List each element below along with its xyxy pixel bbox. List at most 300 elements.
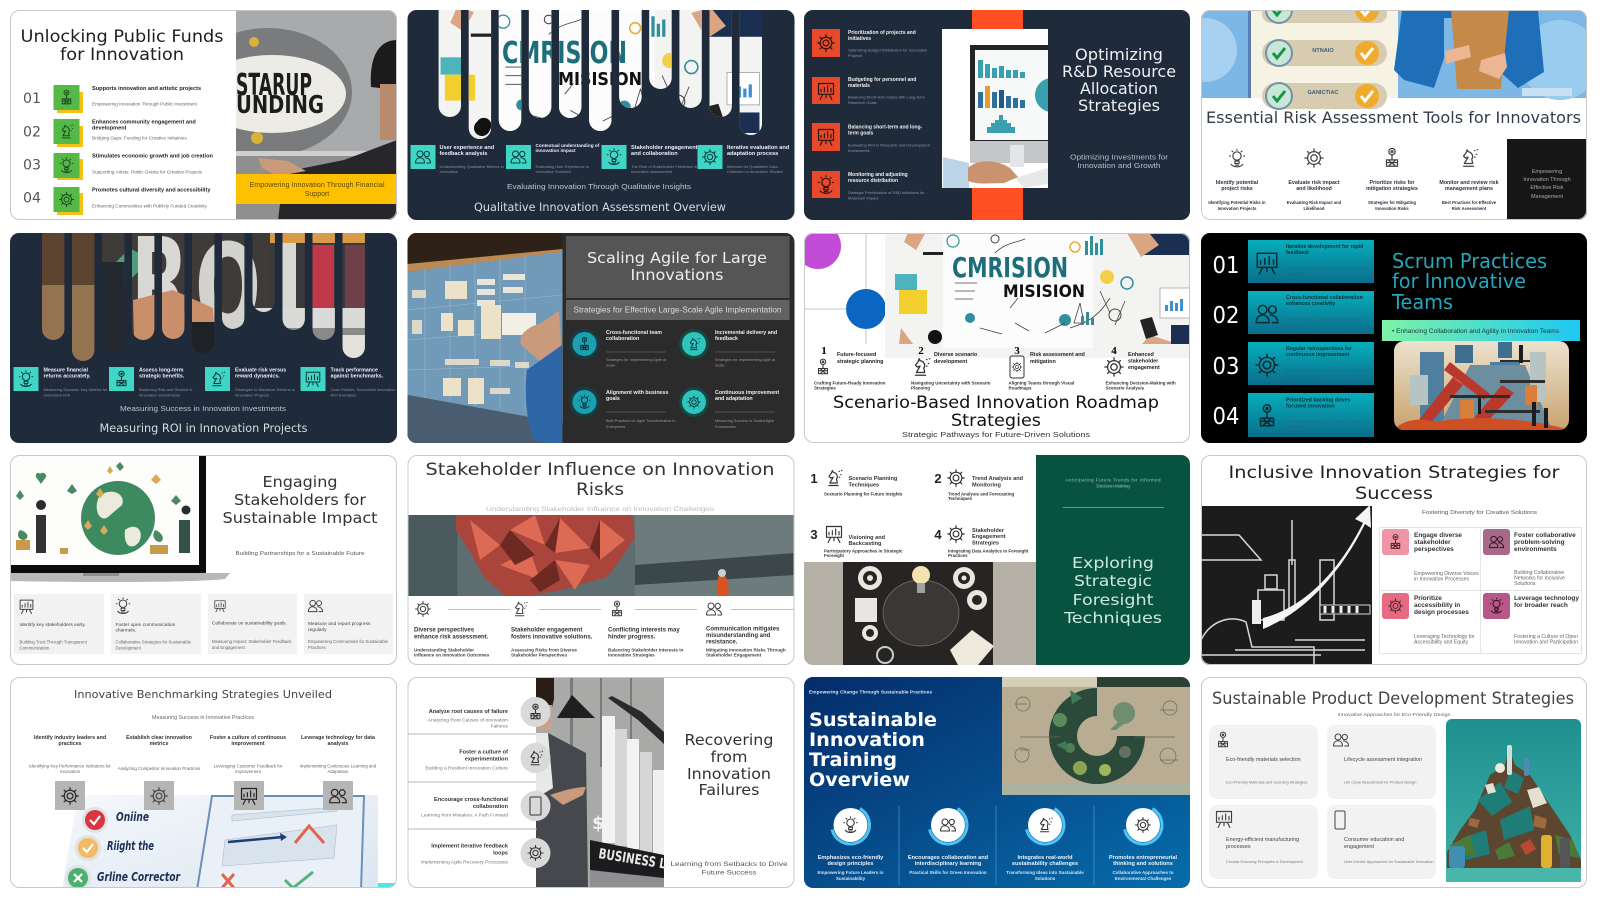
item: iterative evaluation: Methods for Qualitative Data (727, 164, 778, 169)
photo: business loss (536, 677, 667, 888)
item: contextual understanding: Evaluating User Experience in (536, 164, 589, 169)
green side panel: Foresight (1072, 591, 1154, 609)
subtitle: Understanding Stakeholder Influence on Innovation Challenges (486, 506, 715, 513)
column 4 (300, 735, 377, 810)
photo strips: mission desk: MISISION (558, 69, 642, 90)
step 1: Future-focused (837, 352, 876, 358)
item: diverse perspectives (414, 602, 490, 658)
item: stakeholder engagement: Stakeholder Perspectives (511, 652, 567, 658)
list row 01: Supports innovation and artistic projects (92, 86, 201, 92)
subtitle: Building Partnerships for a Sustainable Future (236, 551, 364, 557)
panel: Recovering from Innovation Failures (408, 677, 794, 888)
technique 2: 2 (934, 471, 942, 486)
card: sustainability goals: Measuring Impact: Stakeholder Feedback (212, 639, 292, 644)
panel: Sustainable Product Development Strategies (1201, 677, 1587, 888)
step 3: 3 (1014, 345, 1020, 357)
icon row connectors (448, 608, 795, 610)
resource item 2: materials (848, 83, 870, 89)
green side panel: Decision-Making (1096, 484, 1130, 488)
title: for Innovative (1392, 269, 1526, 293)
card: sustainability goals: Collaborate on sustainability goals. (212, 620, 287, 626)
panel: Inclusive Innovation Strategies for Success (1201, 455, 1587, 665)
training item 1: Sustainability (836, 876, 866, 881)
item: conflicting interests: Balancing Stakeholder Interests in (608, 648, 684, 652)
failure step 3 (421, 791, 550, 821)
failure step 1: Analyze root causes of failure (429, 709, 508, 715)
resource item 1: initiatives (848, 36, 871, 42)
cell: collaborate: Foster collaborative (1514, 532, 1576, 539)
item: stakeholder engagement: The Role of Stakeholder Feedback in (631, 164, 697, 169)
panel: Essential Risk Assessment Tools for Innovators (1201, 10, 1587, 220)
resource item 4 (812, 171, 925, 200)
technique 2: Trend Analysis and (972, 476, 1024, 482)
photo: startup funding: UNDING (236, 90, 324, 119)
panel: Stakeholder Influence on Innovation Risks (408, 455, 795, 665)
list row 03 (23, 153, 213, 180)
technique 4: Integrating Data Analytics in Foresight (948, 548, 1029, 554)
failure step 2 (425, 743, 550, 773)
resource item 4: Strategic Prioritization of R&D Initiatives for (848, 190, 925, 195)
step 4: Scenario Analysis (1106, 386, 1145, 390)
title: Strategies (1078, 96, 1160, 115)
step 2: Planning (911, 386, 930, 390)
item: communication: misunderstanding and (706, 633, 771, 639)
title: Training (809, 749, 897, 771)
technique 1: Scenario Planning (848, 476, 898, 482)
step 4: Enhanced (1128, 352, 1154, 358)
technique 4: Strategies (972, 540, 999, 546)
subtitle: Innovation and Growth (1078, 161, 1160, 170)
item: user experience (410, 145, 504, 174)
item: risk versus reward: Innovation Projects (235, 392, 269, 398)
column 1 (29, 735, 111, 810)
failure step 1 (428, 697, 550, 730)
training item 3: Transforming Ideas into Sustainable (1006, 870, 1084, 875)
panel: Scrum Practices for Innovative Teams (1201, 233, 1587, 443)
tool: prioritize: Strategies for Mitigating (1368, 200, 1416, 205)
card: consumer education: engagement (1344, 844, 1374, 850)
item: benchmarks: Track performance (330, 368, 378, 374)
eyebrow: Empowering Change Through Sustainable Practices (809, 690, 932, 696)
list row 02: 02 (23, 124, 41, 140)
list row 01: Empowering Innovation Through Public Investment (92, 102, 198, 106)
row 01: Enhancing Collaboration Through Daily (1286, 266, 1367, 271)
tagline box: Management (1531, 194, 1564, 200)
item: incremental delivery: Scale (715, 364, 724, 368)
subtitle: Fostering Diversity for Creative Solutions (1422, 510, 1537, 516)
cell: collaborate: Networks for Inclusive (1514, 576, 1565, 582)
technique 3 (810, 526, 903, 558)
illustration: checklist: Oniine (116, 810, 149, 824)
training item 4: thinking and solutions (1113, 861, 1173, 867)
row 02: Delivery (1286, 322, 1303, 328)
subtitle: Future Success (702, 870, 757, 876)
list row 03: Supporting Artists: Public Grants for Creative Projects (92, 170, 203, 174)
cell: engage: in Innovation Processes (1414, 576, 1469, 582)
subtitle box: Strategies for Effective Large-Scale Agile Implementation (574, 306, 782, 314)
photo: monitor with charts (942, 29, 1048, 188)
photo: lightbulb and targets (804, 562, 1036, 665)
card: manufacturing: Circular Economy Principles in Development (1226, 859, 1304, 864)
list row 02 (23, 119, 196, 147)
list row 04: Enhancing Communities with Publicly Funded Creativity (92, 204, 207, 208)
resource item 3: term goals (848, 130, 874, 136)
card: identify stakeholders: Identify key stakeholders early. (20, 622, 86, 628)
card: lifecycle: Lifecycle assessment integration (1344, 757, 1422, 763)
photo strips: mission desk (438, 10, 762, 139)
title: Qualitative Innovation Assessment Overview (474, 200, 726, 214)
illustration: checklist (62, 795, 397, 891)
row 03: Regular retrospectives for (1286, 346, 1352, 352)
row 02 (1212, 291, 1374, 334)
panel: Innovative Benchmarking Strategies Unveiled (10, 677, 397, 891)
technique 2: Monitoring (972, 482, 1001, 488)
item: benchmarks: ROI Examples (330, 392, 356, 398)
green side panel (1036, 455, 1190, 665)
step 1: 1 (821, 345, 827, 357)
step 2: 2 (918, 345, 924, 357)
item: contextual understanding: Innovative Solutions (536, 169, 571, 174)
card: materials: Eco-Friendly Materials and Sourcing Strategies (1226, 780, 1307, 784)
step 3: mitigation (1030, 359, 1056, 365)
item: iterative evaluation: Iterative evaluation and (727, 145, 790, 151)
failure step 2: Foster a culture of (459, 750, 508, 756)
photo strips: mission desk: CMRISION (502, 36, 627, 71)
failure step 3: collaboration (473, 804, 509, 810)
list row 02: Bridging Gaps: Funding for Creative Initiatives (92, 136, 187, 140)
title: Scrum Practices (1392, 249, 1547, 273)
technique 3: Visioning and (848, 535, 886, 541)
item: iterative evaluation: adaptation process (727, 151, 778, 157)
resource item 2 (812, 77, 925, 105)
band: yellow tagline (236, 174, 397, 204)
cell: prioritize: Accessibility and Equity (1414, 640, 1469, 646)
cell: collaborate: problem-solving (1514, 539, 1565, 546)
item: communication: Stakeholder Engagement (706, 652, 762, 658)
column 1: practices (58, 741, 82, 747)
card: sustainability goals (208, 594, 297, 654)
item: financial returns (14, 367, 108, 398)
list row 02: development (92, 126, 127, 132)
row 04: focused innovation (1286, 404, 1335, 410)
cell: prioritize: Prioritize (1414, 595, 1442, 602)
title (1228, 463, 1560, 504)
resource item 2: Balancing Short-term Gains with Long-term (848, 94, 925, 100)
row 01: Iterative development for rapid (1286, 244, 1363, 250)
technique 4: 4 (934, 527, 942, 542)
cell: leverage: Leverage technology (1514, 595, 1579, 602)
item: alignment: Alignment with business (606, 390, 668, 396)
training item 4: Collaborative Approaches to (1112, 870, 1174, 875)
item: stakeholder engagement: Stakeholder engagement (631, 145, 698, 151)
item: incremental delivery: Strategies for Implementing Agile at (715, 358, 776, 362)
card: manufacturing (1209, 805, 1318, 879)
item: risk versus reward: reward dynamics. (235, 374, 280, 380)
technique 3: Participatory Approaches in Strategic (824, 548, 903, 554)
title: Overview (809, 769, 910, 791)
step 1 (814, 345, 886, 390)
cell: engage: perspectives (1414, 546, 1454, 553)
tool: monitor (1439, 150, 1499, 211)
item: cross-functional: collaboration (606, 336, 639, 342)
item: cross-functional: Strategies for Implementing Agile at (606, 358, 667, 362)
card: open communication: Development (116, 646, 142, 650)
tool: evaluate impact: and likelihood (1296, 186, 1332, 192)
item: continuous improvement: Frameworks (715, 425, 736, 429)
card: progress: regularly (308, 627, 327, 633)
failure step 4: Implementing Agile Recovery Processes (420, 860, 509, 866)
item: incremental delivery: feedback (715, 336, 738, 342)
step 3: Aligning Teams through Visual (1008, 380, 1074, 386)
item: alignment: goals (606, 396, 620, 402)
item: user experience: User experience and (440, 145, 495, 151)
resource item 3: Evaluating ROI in Research and Development (848, 142, 931, 148)
column 4: Implementing Continuous Learning and (300, 764, 377, 768)
decorative circles (795, 223, 895, 344)
tool: monitor: Best Practices for Effective (1442, 200, 1497, 205)
tagline box: Innovation Through (1523, 177, 1571, 183)
row 02: Sprint Planning for Effective Innovation (1286, 317, 1366, 322)
title: Innovation (687, 765, 771, 783)
step 4: stakeholder (1128, 358, 1159, 364)
column 3: Foster a culture of continuous (210, 735, 286, 741)
training item 2 (908, 799, 989, 875)
title box: Scaling Agile for Large (587, 249, 767, 267)
item: communication: Communication mitigates (706, 626, 780, 632)
card: lifecycle (1327, 725, 1436, 799)
illustration: checklist: Riight the (107, 839, 154, 853)
title: Innovative Benchmarking Strategies Unveiled (74, 689, 332, 701)
item: strategic benefits: Assess long-term (139, 368, 184, 374)
title: Failures (698, 781, 760, 799)
resource item 2: Budgeting for personnel and (848, 77, 916, 83)
cell: engage: stakeholder (1414, 539, 1451, 546)
column 1: Innovation (60, 769, 81, 774)
tool: identify risks: Identify potential (1216, 180, 1259, 186)
item: strategic benefits (109, 367, 192, 398)
item: stakeholder engagement (602, 145, 698, 174)
column 3: Improvement (235, 769, 262, 774)
item: risk versus reward: Evaluate risk versus (235, 368, 286, 374)
step 2: development (934, 359, 967, 365)
item: cross-functional: Scale (606, 364, 616, 368)
subtitle band: • Enhancing Collaboration and Agility in Innovation Teams (1392, 328, 1560, 335)
tool: identify risks: Identifying Potential Risks in (1208, 200, 1266, 205)
row 04: Prioritizing Backlogs to Drive Creative (1286, 419, 1363, 424)
item: stakeholder engagement: Innovation Assessment (631, 169, 673, 174)
row 01: feedback (1286, 250, 1309, 256)
item: risk versus reward (205, 367, 295, 398)
subtitle box (566, 300, 790, 320)
cell: collaborate: environments (1514, 546, 1557, 553)
failure step 4: Implement iterative feedback (431, 844, 509, 850)
item: continuous improvement: Measuring Success in Scaled Agile (715, 419, 774, 423)
failure step 4: loops (493, 850, 508, 856)
item: cross-functional (570, 329, 667, 368)
title (809, 709, 937, 791)
item: stakeholder engagement (511, 602, 593, 658)
technique 3: 3 (810, 527, 818, 542)
item: user experience: Innovation (440, 169, 458, 174)
item: conflicting interests: Conflicting interests may (608, 628, 680, 634)
training item 4 (1109, 799, 1177, 881)
technique 2 (934, 470, 1024, 501)
photo: mission desk: CMRISION (952, 251, 1068, 284)
training item 1: design principles (827, 861, 874, 867)
item: iterative evaluation (698, 145, 790, 174)
training item 1 (817, 799, 884, 881)
item: alignment: Best Practices for Agile Transformation in (606, 419, 675, 423)
item: benchmarks: against benchmarks. (330, 374, 384, 380)
title: Stakeholders for (234, 491, 367, 509)
subtitle (1070, 154, 1168, 168)
column 3: Leveraging Customer Feedback for (214, 764, 283, 768)
subtitle: Evaluating Innovation Through Qualitative Insights (507, 182, 691, 191)
cell: prioritize (1382, 593, 1475, 646)
card: progress: Measure and report progress (308, 621, 371, 627)
card: open communication: Foster open communication (116, 622, 176, 628)
step 4: engagement (1128, 365, 1160, 371)
cell: prioritize: accessibility in (1414, 602, 1460, 609)
orange stripe (972, 10, 1023, 220)
item: diverse perspectives: Influence on Innovation Outcomes (414, 652, 490, 658)
card: identify stakeholders: Building Trust Through Transparent (20, 640, 88, 644)
column 4: analysis (328, 741, 349, 747)
title: Allocation (1080, 79, 1158, 98)
title (426, 460, 774, 500)
technique 4: Practices (948, 553, 968, 558)
cell: leverage: for broader reach (1514, 602, 1568, 609)
row 02: enhances creativity (1286, 301, 1335, 307)
step 4 (1105, 345, 1176, 390)
subtitle band (1382, 320, 1580, 341)
title (1062, 45, 1176, 115)
column 2: Analyzing Competitor Innovation Practices (118, 766, 201, 771)
technique 1: Techniques (848, 482, 879, 488)
technique 1: Scenario Planning for Future Insights (824, 492, 903, 496)
item: contextual understanding: Contextual understanding of (536, 143, 600, 148)
cell: engage (1382, 529, 1479, 582)
panel: Scaling Agile for Large Innovations (407, 233, 794, 445)
row 03: 03 (1212, 354, 1240, 380)
photo: checklist and clipboard: GANICTIAC (1307, 90, 1339, 96)
training item 1: Empowering Future Leaders in (817, 870, 884, 875)
card: consumer education (1327, 805, 1436, 879)
technique 3: Foresight (824, 553, 845, 558)
title: Unlocking Public Funds (20, 27, 224, 47)
item: stakeholder engagement: fosters innovative solutions. (511, 634, 593, 640)
list row 04: 04 (23, 190, 41, 206)
photo: startup funding: STARUP (236, 68, 312, 103)
card: identify stakeholders (14, 594, 104, 654)
photo: business loss: BUSINESS L (597, 846, 667, 873)
panel: Engaging Stakeholders for Sustainable Impact (10, 455, 397, 665)
item: continuous improvement (679, 387, 779, 429)
item: incremental delivery (679, 329, 777, 368)
row 03: continuous improvement (1286, 352, 1350, 358)
step 1: Strategies (814, 386, 836, 390)
title: Sustainable Product Development Strategies (1212, 689, 1574, 708)
subtitle: Innovative Approaches for Eco-Friendly Design (1338, 712, 1451, 718)
photo: business loss: $ (592, 813, 605, 834)
cell: collaborate: Building Collaborative (1514, 570, 1564, 576)
training item 4: Environmental Challenges (1115, 876, 1172, 881)
title: Recovering (684, 731, 774, 749)
step 4: Enhancing Decision-Making with (1106, 380, 1176, 386)
card: materials (1209, 725, 1318, 799)
failure step 1: Analyzing Root Causes of Innovation (428, 718, 508, 724)
technique 3: Backcasting (848, 541, 882, 547)
resource item 3: Balancing short-term and long- (848, 124, 923, 130)
cell: collaborate: Solutions (1514, 581, 1536, 587)
card: open communication (111, 594, 201, 654)
tool: prioritize: mitigation strategies (1366, 186, 1418, 192)
card: open communication: channels. (116, 628, 136, 634)
title: Teams (1391, 290, 1453, 314)
item: conflicting interests (608, 601, 684, 658)
title (684, 731, 774, 799)
subtitle: Measuring Success in Innovation Investments (120, 404, 286, 413)
technique 4: Stakeholder (972, 528, 1005, 534)
row 03 (1212, 342, 1374, 385)
photo: startup funding (236, 10, 397, 220)
photo: faceted red sculpture (408, 515, 795, 596)
failure step 2: experimentation (465, 756, 509, 762)
card: consumer education: Consumer education and (1344, 837, 1404, 843)
resource item 4: Maximum Impact (848, 196, 879, 200)
item: continuous improvement: and adaptation (715, 396, 753, 402)
row 03: Future Success (1286, 374, 1319, 378)
column 4: Leverage technology for data (301, 735, 375, 741)
item: financial returns: returns accurately. (44, 374, 91, 380)
strategy grid (1379, 527, 1582, 654)
technique 4 (934, 526, 1029, 558)
item: strategic benefits: Balancing Risk and Reward in (139, 387, 192, 392)
card: open communication: Collaborative Strategies for Sustainable (116, 640, 192, 644)
tool: prioritize (1366, 148, 1418, 211)
item: stakeholder engagement: Stakeholder engagement (511, 628, 582, 634)
cell: leverage (1483, 593, 1579, 646)
photo: line-art growth arrow (1201, 505, 1372, 665)
item: risk versus reward: Strategies to Maximize Returns in (235, 387, 295, 392)
photo: checklist and clipboard (1201, 10, 1587, 110)
green side panel: Anticipating Future Trends for Informed (1066, 478, 1161, 482)
training item 3 (1006, 799, 1084, 881)
title: Sustainable (809, 709, 937, 731)
green side panel: Strategic (1074, 572, 1152, 590)
item: financial returns: Innovation ROI (44, 392, 70, 398)
resource item 1: Optimizing Budget Distribution for Innovation (848, 48, 927, 52)
photo strips: ROI: O (195, 218, 261, 356)
training item 3: sustainability challenges (1012, 861, 1078, 867)
panel: Exploring Strategic Foresight Techniques (804, 455, 1190, 665)
column 1: Identifying Key Performance Indicators for (29, 764, 111, 768)
title: Scenario-Based Innovation Roadmap (833, 393, 1159, 413)
item: alignment: Enterprises (606, 425, 625, 429)
resource item 1 (812, 29, 927, 58)
title: Innovation (809, 729, 925, 751)
cell: leverage: Innovation and Participation (1514, 640, 1578, 646)
column 2: metrics (150, 741, 168, 747)
training item 2: Encourages collaboration and (908, 855, 989, 861)
step 1: strategic planning (837, 359, 883, 365)
technique 2: Trend Analysis and Forecasting (948, 492, 1015, 496)
photo: circular economy diagram (1002, 677, 1190, 795)
tool: identify risks (1208, 149, 1266, 211)
technique 1: 1 (810, 471, 818, 486)
panel: Qualitative Innovation Assessment Overview (408, 2, 794, 220)
panel: Measuring ROI in Innovation Projects (10, 212, 397, 443)
